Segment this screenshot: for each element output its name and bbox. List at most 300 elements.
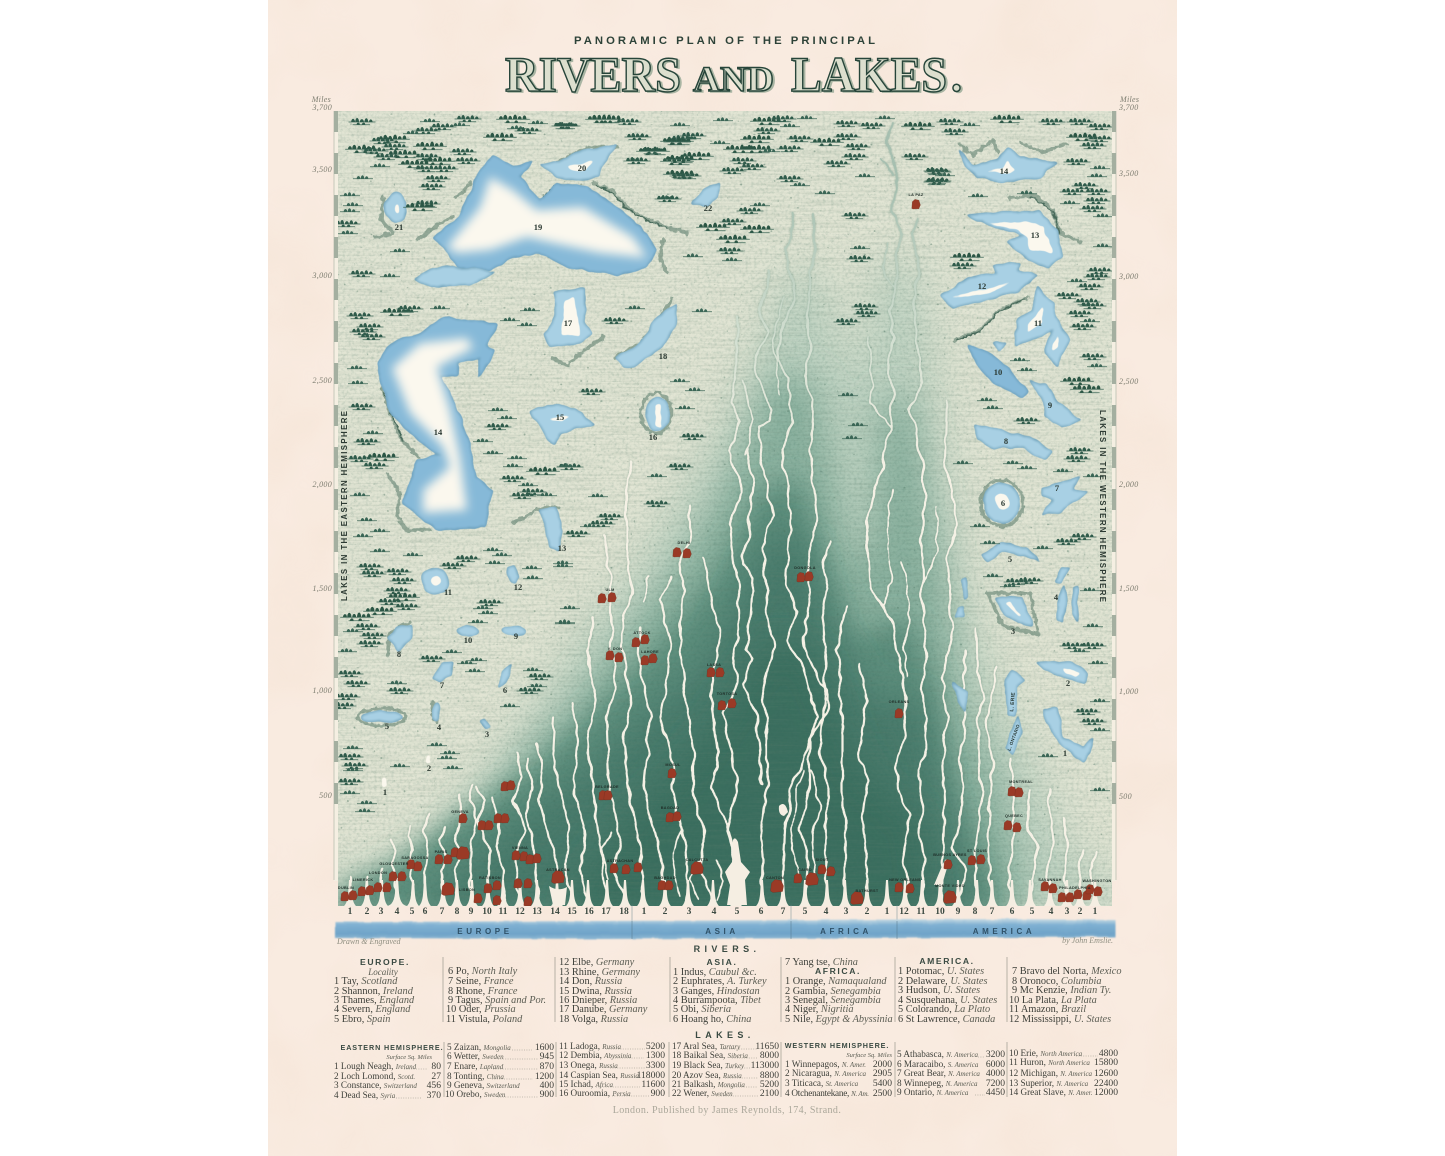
Europe list: 7 Seine, France <box>448 976 514 987</box>
lake 8 <box>387 625 412 659</box>
sea band: EUROPE <box>457 927 513 936</box>
scale labels right: 1,500 <box>1119 584 1138 593</box>
eastern hemisphere table: EASTERN HEMISPHERE. <box>341 1043 443 1052</box>
river numbers: 12 <box>515 907 525 917</box>
lake 6 <box>498 663 512 695</box>
lake W12 <box>940 263 1038 308</box>
lake W8 <box>975 425 1052 460</box>
Europe list: 18 Volga, Russia <box>559 1014 628 1025</box>
western hemisphere table: 7200 <box>986 1078 1005 1089</box>
sea band <box>335 919 1115 939</box>
lake 5 <box>362 712 402 731</box>
scale labels left: 2,500 <box>312 376 332 385</box>
lake 19 Black Sea: 19 <box>534 222 542 232</box>
Europe list: 15 Dwina, Russia <box>559 986 632 997</box>
river numbers: 8 <box>973 907 978 917</box>
rivers legend <box>334 956 1122 1025</box>
eastern hemisphere table: 19 Black Sea, Turkey <box>672 1060 745 1070</box>
eastern hemisphere table: 370 <box>427 1090 441 1101</box>
scale labels left: 3,500 <box>312 165 332 174</box>
western hemisphere table: 14 Great Slave, N. Amer. <box>1009 1087 1093 1097</box>
lake 10 <box>457 626 479 645</box>
lake 7 <box>432 662 453 690</box>
lake W11: 11 <box>1034 318 1042 328</box>
lake 13: 13 <box>558 543 566 553</box>
lake 15 <box>530 405 595 444</box>
lake 18 <box>615 303 677 367</box>
western hemisphere table: 12000 <box>1094 1087 1118 1098</box>
river numbers: 2 <box>663 907 668 917</box>
western hemisphere table: 5 Athabasca, N. America <box>897 1049 979 1059</box>
lakes legend <box>334 1041 1118 1101</box>
river numbers: 3 <box>844 907 849 917</box>
sea band: AFRICA <box>820 927 872 936</box>
city names: BAGDAD <box>661 806 679 810</box>
city names: BATHURST <box>856 889 879 893</box>
eastern hemisphere table: 10 Orebo, Sweden <box>445 1089 506 1099</box>
city names: MOSUL <box>665 763 681 767</box>
America list: 11 Amazon, Brazil <box>1009 1004 1086 1015</box>
Asia list: 7 Yang tse, China <box>785 957 858 968</box>
river numbers: 10 <box>482 907 492 917</box>
eastern hemisphere table: 1300 <box>646 1050 665 1061</box>
lake 8: 8 <box>397 649 401 659</box>
America list: 7 Bravo del Norta, Mexico <box>1012 966 1122 977</box>
lake W14: 14 <box>1000 166 1009 176</box>
Asia list: 3 Ganges, Hindostan <box>673 986 760 997</box>
city names: CANTON <box>766 876 784 880</box>
eastern hemisphere table: 900 <box>540 1089 554 1100</box>
lakes heading: LAKES. <box>695 1030 755 1040</box>
eastern hemisphere table: 11600 <box>641 1079 665 1090</box>
river numbers: 7 <box>990 907 995 917</box>
western hemisphere table: 2500 <box>873 1088 892 1099</box>
America list: 12 Mississippi, U. States <box>1009 1014 1111 1025</box>
city names: CAIRO <box>798 868 812 872</box>
lake 17: 17 <box>564 318 573 328</box>
lake 1 <box>381 778 387 797</box>
western hemisphere table: 1 Winnepagos, N. Amer. <box>785 1059 866 1069</box>
lake 17 <box>545 288 592 347</box>
city names: CALCUTTA <box>686 858 708 862</box>
lake W11 <box>1015 287 1070 367</box>
subtitle: PANORAMIC PLAN OF THE PRINCIPAL <box>574 35 875 47</box>
lake W2 <box>1037 662 1088 688</box>
western hemisphere table: 2 Nicaragua, N. America <box>785 1068 866 1078</box>
lake W13 <box>967 212 1062 268</box>
eastern hemisphere table <box>334 1041 779 1101</box>
lake 16 <box>645 397 669 442</box>
western hemisphere table: 4000 <box>986 1068 1005 1079</box>
river numbers: 11 <box>499 907 508 917</box>
lake W7 <box>1042 477 1088 515</box>
eastern hemisphere table: 3 Constance, Switzerland <box>334 1080 417 1090</box>
lake 15: 15 <box>556 412 564 422</box>
paper sheet <box>268 0 1177 1156</box>
eastern hemisphere table: 2100 <box>760 1088 779 1099</box>
city names: ST LOUIS <box>967 849 987 853</box>
lake 7: 7 <box>440 680 445 690</box>
river numbers: 10 <box>935 907 945 917</box>
river numbers: 6 <box>423 907 428 917</box>
America list: 8 Oronoco, Columbia <box>1012 976 1102 987</box>
Africa list: 5 Nile, Egypt & Abyssinia <box>785 1014 893 1025</box>
America list: 5 Colorando, La Plato <box>898 1004 990 1015</box>
lake 11 <box>422 568 452 597</box>
America list: 3 Hudson, U. States <box>898 985 980 996</box>
river numbers: 14 <box>550 907 560 917</box>
lake 4 <box>432 703 442 732</box>
river numbers: 1 <box>642 907 647 917</box>
scale labels left: 3,000 <box>312 271 332 280</box>
lake W12: 12 <box>978 281 986 291</box>
city names: DUBLIN <box>338 886 354 890</box>
city names: LAHORE <box>641 650 659 654</box>
lakes W4 <box>1054 567 1078 623</box>
eastern hemisphere table: 11650 <box>755 1041 779 1052</box>
lake 10: 10 <box>464 635 472 645</box>
western hemisphere table: WESTERN HEMISPHERE. <box>785 1041 889 1050</box>
lake 14 Caspian <box>377 318 497 530</box>
Europe list: 11 Vistula, Poland <box>446 1014 523 1025</box>
America list <box>898 956 1122 1025</box>
Africa list: 2 Gambia, Senegambia <box>785 986 881 997</box>
Africa list: 1 Orange, Namaqualand <box>785 976 887 987</box>
Africa list: 3 Senegal, Senegambia <box>785 995 881 1006</box>
western hemisphere table: 10 Erie, North America <box>1009 1048 1083 1058</box>
river numbers: 6 <box>759 907 764 917</box>
eastern hemisphere table: 1200 <box>535 1071 554 1082</box>
lake W1: 1 <box>1063 748 1067 758</box>
western hemisphere table: 8 Winnepeg, N. America <box>897 1078 978 1088</box>
river numbers: 18 <box>619 907 629 917</box>
eastern hemisphere table: 16 Ouroomia, Persia <box>559 1088 631 1098</box>
city names: RATISBON <box>479 876 501 880</box>
Europe list: 2 Shannon, Ireland <box>334 986 414 997</box>
lake 2 <box>427 755 431 773</box>
western hemisphere table: 9 Ontario, N. America <box>897 1087 969 1097</box>
main title <box>505 46 962 102</box>
eastern hemisphere table: 14 Caspian Sea, Russia <box>559 1070 639 1080</box>
eastern hemisphere table: 27 <box>431 1071 441 1082</box>
city names: ORLEANS <box>889 700 909 704</box>
eastern hemisphere table: 8000 <box>760 1050 779 1061</box>
Africa list: 4 Niger, Nigritia <box>785 1004 854 1015</box>
city names: WASHINGTON <box>1082 879 1112 883</box>
lake Ontario: L. ONTARIO <box>1006 723 1021 752</box>
lake W9 <box>1030 380 1080 427</box>
lake 9 <box>503 626 525 641</box>
city names: MONTE VIDEO <box>935 884 965 888</box>
city names: NEW ORLEANS <box>889 878 921 882</box>
lake W5 <box>982 542 1040 564</box>
western hemisphere table: 12600 <box>1094 1068 1118 1079</box>
Europe list: Locality <box>367 967 398 977</box>
river numbers: 1 <box>885 907 890 917</box>
lake 20 Azov: 20 <box>578 163 586 173</box>
lake 21: 21 <box>395 222 403 232</box>
America list: AMERICA. <box>919 956 975 966</box>
America list: 10 La Plata, La Plata <box>1009 995 1097 1006</box>
eastern hemisphere table: 11 Ladoga, Russia <box>559 1041 621 1051</box>
city names: BUENOS AYRES <box>933 853 967 857</box>
river numbers: 9 <box>956 907 961 917</box>
lake W7: 7 <box>1055 483 1060 493</box>
river numbers: 1 <box>1093 907 1098 917</box>
lake 14 Caspian: 14 <box>434 427 443 437</box>
eastern hemisphere table: 8 Tonting, China <box>447 1071 504 1081</box>
paper grain <box>338 111 1112 906</box>
river numbers: 4 <box>395 907 400 917</box>
scale ruler right <box>1112 111 1116 881</box>
western hemisphere table: 4450 <box>986 1087 1005 1098</box>
Africa list: AFRICA. <box>815 966 861 976</box>
Europe list: 4 Severn, England <box>334 1004 411 1015</box>
main title: RIVERS <box>505 46 681 102</box>
vertical label right: LAKES IN THE WESTERN HEMISPHERE <box>1098 410 1107 602</box>
lake 2: 2 <box>427 763 431 773</box>
lake W1 <box>1043 708 1093 762</box>
western hemisphere table: 11 Huron, North America <box>1009 1057 1090 1067</box>
lake Erie <box>1005 670 1025 717</box>
lake 12: 12 <box>514 582 522 592</box>
river numbers: 17 <box>601 907 611 917</box>
Asia list: ASIA. <box>707 957 737 967</box>
lake W3: 3 <box>1011 626 1015 636</box>
lake W2: 2 <box>1066 678 1070 688</box>
river numbers: 3 <box>379 907 384 917</box>
lake 21 <box>385 193 407 232</box>
Asia list: 2 Euphrates, A. Turkey <box>673 976 767 987</box>
Europe list: 12 Elbe, Germany <box>559 957 635 968</box>
eastern hemisphere table: 1 Lough Neagh, Ireland <box>334 1061 417 1071</box>
city names: SIOUT <box>815 858 829 862</box>
city names: VIENNA <box>512 846 528 850</box>
lakes western hemisphere <box>940 148 1093 762</box>
small lake <box>992 342 1007 352</box>
eastern hemisphere table: 5 Zaizan, Mongolia <box>447 1042 511 1052</box>
mountain wash <box>336 260 1112 915</box>
eastern hemisphere table: 400 <box>540 1080 554 1091</box>
America list: 1 Potomac, U. States <box>898 966 984 977</box>
river numbers: 13 <box>532 907 542 917</box>
eastern hemisphere table: 13 Onega, Russia <box>559 1060 618 1070</box>
Asia list: 5 Obi, Siberia <box>673 1004 731 1015</box>
river numbers: 1 <box>348 907 353 917</box>
river numbers: 6 <box>1010 907 1015 917</box>
scale labels right: 2,500 <box>1119 377 1138 386</box>
city names: BAGHDAD <box>654 876 676 880</box>
eastern hemisphere table: 7 Enare, Lapland <box>447 1061 504 1071</box>
western hemisphere table: 6000 <box>986 1059 1005 1070</box>
lake 12 <box>507 565 522 592</box>
small lakes near mountains edge <box>953 683 967 712</box>
scale labels right: 500 <box>1119 792 1132 801</box>
city names: ATTOCK <box>633 631 651 635</box>
river numbers: 9 <box>469 907 474 917</box>
lake W10 <box>968 345 1028 397</box>
city names: DELHI <box>678 541 690 545</box>
river numbers: 5 <box>803 907 808 917</box>
scale labels right: 3,000 <box>1118 272 1138 281</box>
text: by John Emslie. <box>1062 936 1113 945</box>
America list: 4 Susquehana, U. States <box>898 995 997 1006</box>
city names: PHILADELPHIA <box>1059 886 1091 890</box>
lake W6: 6 <box>1001 498 1005 508</box>
eastern hemisphere table: 20 Azov Sea, Russia <box>672 1070 742 1080</box>
scale labels right: 1,000 <box>1119 687 1138 696</box>
lakes eastern hemisphere <box>362 145 720 797</box>
city names: QUEBEC <box>1005 814 1023 818</box>
eastern hemisphere table: 17 Aral Sea, Tartary <box>672 1041 741 1051</box>
Europe list: 13 Rhine, Germany <box>559 967 640 978</box>
city names: LISBON <box>459 888 475 892</box>
city names: GLOUCESTER <box>379 862 409 866</box>
western hemisphere table: 5400 <box>873 1078 892 1089</box>
lake 5: 5 <box>385 721 389 731</box>
river numbers: 4 <box>824 907 829 917</box>
Europe list: 10 Oder, Prussia <box>446 1004 516 1015</box>
lake W5: 5 <box>1008 554 1012 564</box>
lake 9: 9 <box>514 631 518 641</box>
lake above Caspian <box>415 268 495 286</box>
city names: LASSA <box>707 663 721 667</box>
western hemisphere table: 22400 <box>1094 1078 1118 1089</box>
eastern hemisphere table: 456 <box>427 1080 441 1091</box>
city names: BELGRADE <box>595 785 619 789</box>
lake 11: 11 <box>444 587 452 597</box>
lake 18: 18 <box>659 351 667 361</box>
lake 22: 22 <box>704 203 712 213</box>
Europe list: 9 Tagus, Spain and Por. <box>448 995 546 1006</box>
eastern hemisphere table: 18 Baikal Sea, Siberia <box>672 1050 748 1060</box>
Africa list <box>785 966 893 1025</box>
river numbers: 2 <box>865 907 870 917</box>
city names: LIMERICK <box>353 878 373 882</box>
city names: MONTREAL <box>1009 780 1033 784</box>
river numbers: 2 <box>1078 907 1083 917</box>
eastern hemisphere table: 22 Wener, Sweden <box>672 1088 733 1098</box>
Europe list: EUROPE. <box>360 957 410 967</box>
lake 20 Azov <box>540 145 617 180</box>
lake Ontario <box>1005 717 1022 755</box>
eastern hemisphere table: 5200 <box>646 1041 665 1052</box>
river numbers: 3 <box>1065 907 1070 917</box>
rivers heading: RIVERS. <box>694 944 760 954</box>
Europe list <box>334 957 648 1025</box>
sea band: ASIA <box>705 927 739 936</box>
lake 22 <box>692 182 720 213</box>
western hemisphere table: 3 Titicaca, St. America <box>785 1078 859 1088</box>
western hemisphere table: 12 Michigan, N. America <box>1009 1068 1093 1078</box>
western hemisphere table: 7 Great Bear, N. America <box>897 1068 980 1078</box>
Europe list: 1 Tay, Scotland <box>334 976 398 987</box>
Europe list: 3 Thames, England <box>334 995 415 1006</box>
western hemisphere table: 4 Otchenantekane, N. Am. <box>785 1088 869 1098</box>
lake W8: 8 <box>1004 436 1008 446</box>
river numbers: 4 <box>712 907 717 917</box>
Europe list: 8 Rhone, France <box>448 986 518 997</box>
western hemisphere table: Surface Sq. Miles <box>846 1052 892 1059</box>
river numbers: 15 <box>567 907 577 917</box>
lake W3 <box>995 597 1032 636</box>
Europe list: 6 Po, North Italy <box>448 966 518 977</box>
river numbers: 8 <box>455 907 460 917</box>
city names: SARAGOSSA <box>401 856 429 860</box>
eastern hemisphere table: 15 Ichad, Africa <box>559 1079 613 1089</box>
city names: ASTRACHAN <box>607 859 633 863</box>
lake Erie: L. ERIE <box>1009 692 1017 712</box>
city names: PARIS <box>435 850 448 854</box>
eastern hemisphere table: 21 Balkash, Mongolia <box>672 1079 745 1089</box>
eastern hemisphere table: 945 <box>540 1051 554 1062</box>
eastern hemisphere table: 8800 <box>760 1070 779 1081</box>
America list: 6 St Lawrence, Canada <box>898 1014 995 1025</box>
western hemisphere table: 4800 <box>1099 1048 1118 1059</box>
Europe list: 17 Danube, Germany <box>559 1004 648 1015</box>
vertical label left: LAKES IN THE EASTERN HEMISPHERE <box>340 411 349 601</box>
lake 3 <box>480 719 490 739</box>
America list: 9 Mc Kenzie, Indian Ty. <box>1012 985 1111 996</box>
river numbers: 4 <box>1049 907 1054 917</box>
dotted leaders <box>396 1049 1098 1098</box>
eastern hemisphere table: 3300 <box>646 1060 665 1071</box>
eastern hemisphere table: 4 Dead Sea, Syria <box>334 1090 396 1100</box>
eastern hemisphere table: 6 Wetter, Sweden <box>447 1051 504 1061</box>
eastern hemisphere table: 113000 <box>751 1060 779 1071</box>
lake 3: 3 <box>485 729 489 739</box>
scale labels left: Miles <box>311 95 331 104</box>
Asia list: 6 Hoang ho, China <box>673 1014 751 1025</box>
river mouths <box>340 804 1105 908</box>
scale labels left: 1,000 <box>312 686 332 695</box>
scale labels left: 1,500 <box>312 584 332 593</box>
river numbers: 3 <box>687 907 692 917</box>
Europe list: 14 Don, Russia <box>559 976 622 987</box>
city names: V. DON <box>608 647 622 651</box>
city names: DONGOLA <box>794 566 816 570</box>
city names: SAVANNAH <box>1038 878 1062 882</box>
eastern hemisphere table: 900 <box>651 1088 665 1099</box>
city names: GENEVA <box>451 810 469 814</box>
publisher line: London. Published by James Reynolds, 174, Strand. <box>613 1105 841 1116</box>
main title: LAKES <box>791 46 947 102</box>
map background <box>338 111 1112 906</box>
city names: ASTRACAN <box>546 868 570 872</box>
river numbers: 5 <box>735 907 740 917</box>
America list: 2 Delaware, U. States <box>898 976 988 987</box>
Asia list: 4 Burrampoota, Tibet <box>673 995 762 1006</box>
river numbers: 7 <box>440 907 445 917</box>
Asia list: 1 Indus, Caubul &c. <box>673 967 757 978</box>
rivers <box>350 123 1097 905</box>
engraver credits: Drawn & Engraved <box>336 937 402 946</box>
lake W10: 10 <box>994 367 1002 377</box>
western hemisphere table: 15800 <box>1094 1057 1118 1068</box>
Europe list: 16 Dnieper, Russia <box>559 995 637 1006</box>
scale labels right: 3,700 <box>1118 103 1138 112</box>
mountain ranges <box>358 140 1080 726</box>
lake 4: 4 <box>437 722 442 732</box>
main title: . <box>951 52 962 101</box>
eastern hemisphere table: 870 <box>540 1061 554 1072</box>
cities <box>341 199 1102 906</box>
eastern hemisphere table: Surface Sq. Miles <box>386 1054 432 1061</box>
eastern hemisphere table: 118000 <box>637 1070 665 1081</box>
main title: AND <box>693 59 774 99</box>
city names <box>338 193 1112 893</box>
lake 1: 1 <box>383 787 387 797</box>
